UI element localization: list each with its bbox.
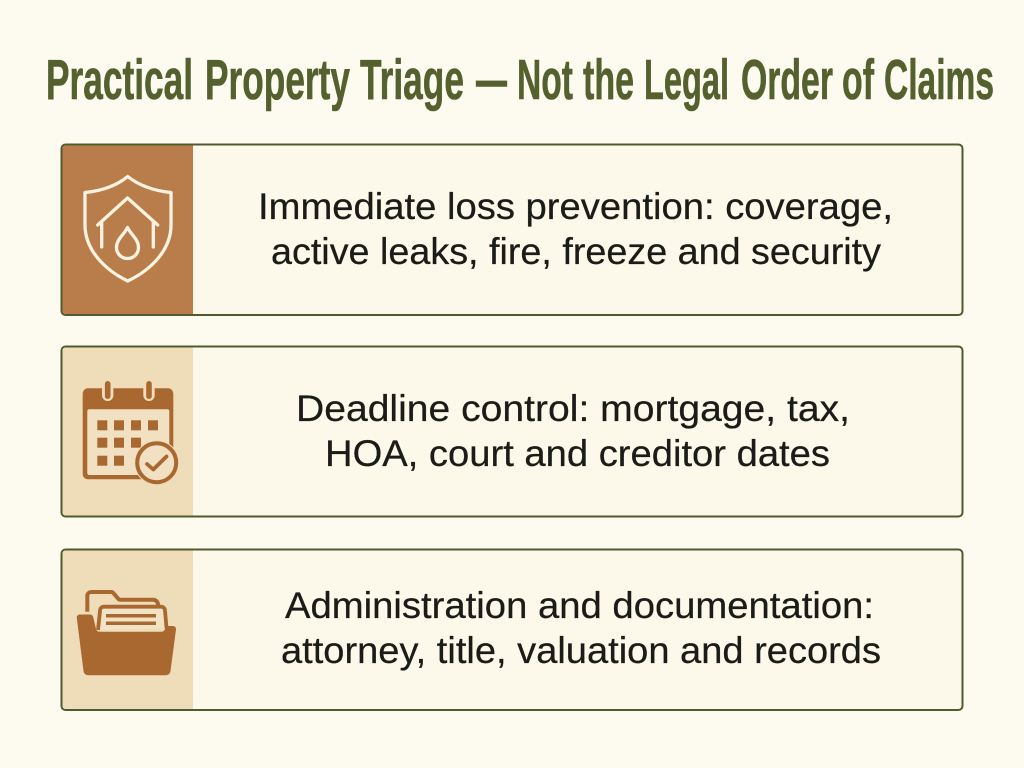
icon: calendar with check mark xyxy=(83,378,179,485)
title: Legal xyxy=(644,48,729,112)
text: deadline control: Deadline control: mortgage, tax, xyxy=(296,388,850,429)
title: of xyxy=(842,48,875,112)
icon: open folder with documents xyxy=(77,592,176,675)
title: the xyxy=(583,48,634,112)
text: administration and documentation: attorney, title, valuation and records xyxy=(281,630,881,671)
text: deadline control xyxy=(296,388,850,474)
panel: immediate loss prevention xyxy=(62,144,962,315)
title: Practical xyxy=(46,48,193,112)
icon: shield with house and water drop xyxy=(85,176,171,281)
title: Order xyxy=(741,48,833,112)
text: immediate loss prevention: active leaks, fire, freeze and security xyxy=(271,231,882,272)
title: Not xyxy=(517,48,573,112)
text: deadline control: HOA, court and creditor dates xyxy=(325,433,830,474)
panel: administration and documentation xyxy=(62,550,962,710)
title: Triage xyxy=(360,48,464,112)
title xyxy=(46,48,994,112)
text: administration and documentation: Administration and documentation: xyxy=(285,585,874,626)
text: immediate loss prevention: Immediate loss prevention: coverage, xyxy=(258,186,893,227)
text: immediate loss prevention xyxy=(258,186,893,272)
title: Property xyxy=(205,48,350,112)
text: administration and documentation xyxy=(281,585,881,671)
title: — xyxy=(476,48,507,112)
panel: deadline control xyxy=(62,346,962,516)
